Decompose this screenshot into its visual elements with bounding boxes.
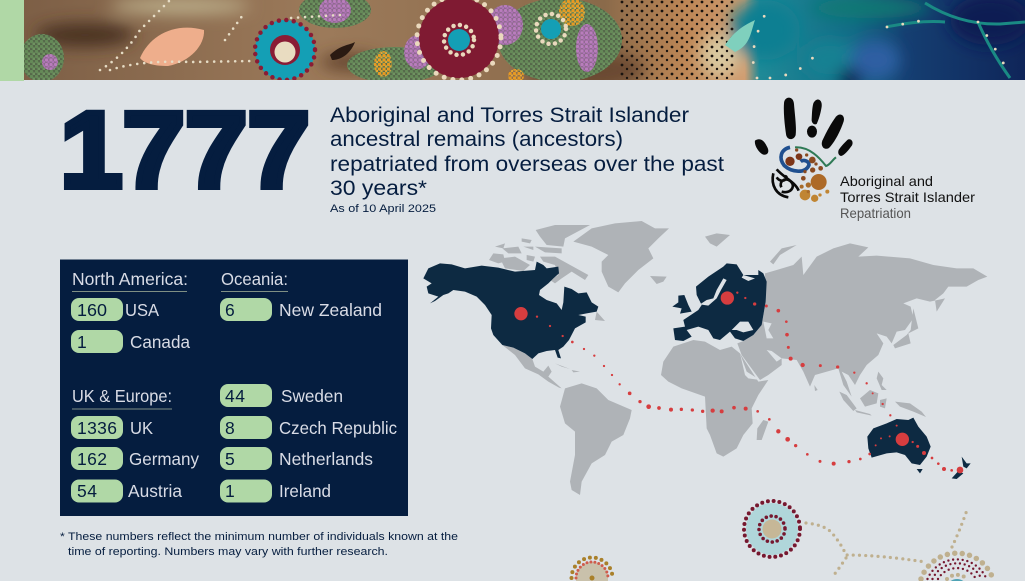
banner dot ring: maroon and cream bbox=[417, 0, 501, 80]
row: UK: 1336 bbox=[77, 418, 117, 438]
row: New Zealand: 6 bbox=[225, 300, 235, 320]
row: Austria: 54 bbox=[77, 481, 97, 501]
row: Canada bbox=[71, 330, 190, 353]
heading: Oceania: Oceania: bbox=[221, 269, 288, 289]
row: UK: UK bbox=[130, 418, 153, 438]
banner dot ring: teal and cream bbox=[536, 14, 566, 44]
headline text block: 30 years* bbox=[330, 176, 428, 200]
row: Sweden: 44 bbox=[225, 386, 245, 406]
map: Europe highlighted bbox=[672, 263, 767, 341]
map: Australia highlighted bbox=[867, 418, 931, 465]
row: Austria: Austria bbox=[128, 481, 182, 501]
dot ring: gold and red bbox=[572, 558, 612, 581]
row: Austria bbox=[71, 480, 182, 502]
date note: As of 10 April 2025 bbox=[330, 203, 436, 215]
row: Sweden: Sweden bbox=[281, 386, 343, 406]
headline text block: Aboriginal and Torres Strait Islander bbox=[330, 103, 689, 127]
decorative dot circles and trails bbox=[572, 501, 993, 581]
panel: repatriation counts bbox=[60, 260, 408, 516]
dotted trail bbox=[806, 510, 967, 576]
logo text: Aboriginal and bbox=[840, 173, 933, 189]
dot ring: beige, maroon and teal bbox=[921, 553, 993, 581]
world map bbox=[423, 221, 987, 495]
footnote: time of reporting. Numbers may vary with further research. bbox=[68, 546, 388, 558]
heading: UK and Europe: UK & Europe: bbox=[72, 386, 172, 406]
heading: North America: North America: bbox=[72, 269, 188, 289]
row: Canada: 1 bbox=[77, 332, 87, 352]
dot ring: blue and maroon bbox=[744, 501, 800, 557]
row: UK bbox=[71, 416, 153, 439]
row: New Zealand bbox=[220, 298, 382, 321]
row: Czech Republic: 8 bbox=[225, 418, 235, 438]
row: Ireland: Ireland bbox=[279, 481, 331, 501]
row: Netherlands bbox=[220, 447, 373, 470]
map: New Zealand highlighted bbox=[952, 457, 971, 479]
map: grey landmasses bbox=[489, 221, 987, 495]
map: Tasmania bbox=[917, 469, 923, 473]
map: bodies of water bbox=[740, 322, 782, 380]
map: North America highlighted bbox=[423, 262, 598, 359]
row: Netherlands: Netherlands bbox=[279, 449, 373, 469]
headline text block: ancestral remains (ancestors) bbox=[330, 127, 623, 151]
headline text block: repatriated from overseas over the past bbox=[330, 152, 724, 176]
footnote: * These numbers reflect the minimum number of individuals known at the bbox=[60, 531, 458, 543]
row: USA bbox=[71, 298, 159, 321]
row: Czech Republic: Czech Republic bbox=[279, 418, 397, 438]
row: New Zealand: New Zealand bbox=[279, 300, 382, 320]
icon: hand print bbox=[755, 98, 853, 156]
headline number: 1777 bbox=[60, 89, 310, 210]
row: Germany: Germany bbox=[129, 449, 199, 469]
row: Germany: 162 bbox=[77, 449, 107, 469]
row: USA: 160 bbox=[77, 300, 107, 320]
footnote bbox=[60, 531, 458, 558]
row: Canada: Canada bbox=[130, 332, 190, 352]
row: Ireland bbox=[220, 480, 331, 502]
logo text bbox=[840, 173, 975, 221]
logo text: Torres Strait Islander bbox=[840, 189, 975, 205]
banner: artwork bbox=[0, 0, 1025, 81]
headline text block bbox=[330, 103, 724, 200]
row: Sweden bbox=[220, 384, 343, 407]
map: Europe seas bbox=[700, 275, 755, 332]
logo: hand and text bbox=[755, 98, 975, 221]
banner dot ring: teal and maroon bbox=[255, 20, 315, 80]
row: USA: USA bbox=[125, 300, 159, 320]
row: Ireland: 1 bbox=[225, 481, 235, 501]
logo text: Repatriation bbox=[840, 205, 911, 221]
route dots and destination markers bbox=[514, 291, 963, 473]
row: Czech Republic bbox=[220, 416, 397, 439]
row: Germany bbox=[71, 447, 199, 470]
row: Netherlands: 5 bbox=[225, 449, 235, 469]
